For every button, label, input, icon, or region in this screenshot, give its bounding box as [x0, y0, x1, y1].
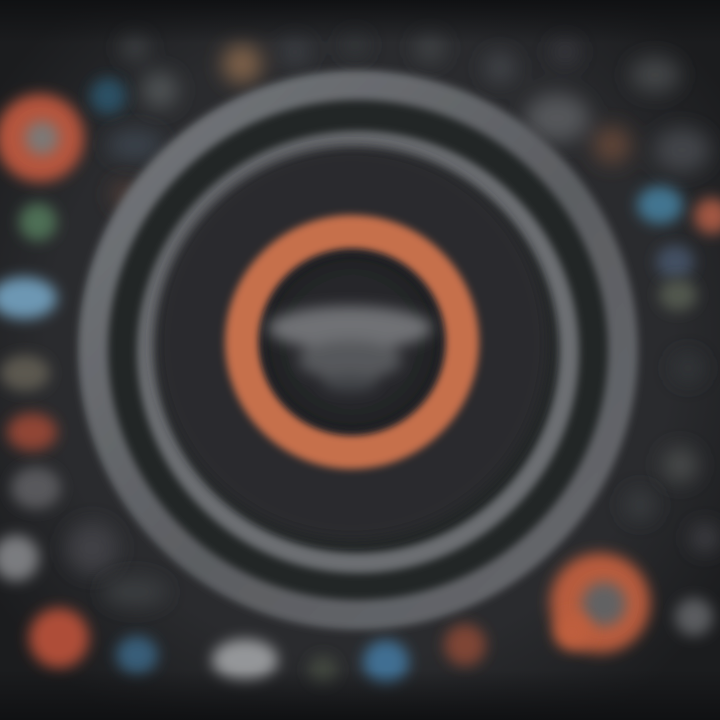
orange ring dark core [262, 252, 442, 432]
dark gap disc behind rings [86, 80, 626, 620]
center blurred gray emblem [268, 306, 432, 392]
outer gray ring [93, 85, 623, 615]
icon cluster: left column [0, 78, 163, 581]
icon cluster: bottom row [29, 577, 486, 685]
inner disc [155, 146, 549, 540]
icon cluster: right column [624, 186, 720, 636]
inner gray ring [147, 141, 569, 563]
orange ring [242, 232, 462, 452]
icon cluster: top small icons [121, 32, 710, 172]
icon: large orange badge bottom right [550, 553, 650, 653]
